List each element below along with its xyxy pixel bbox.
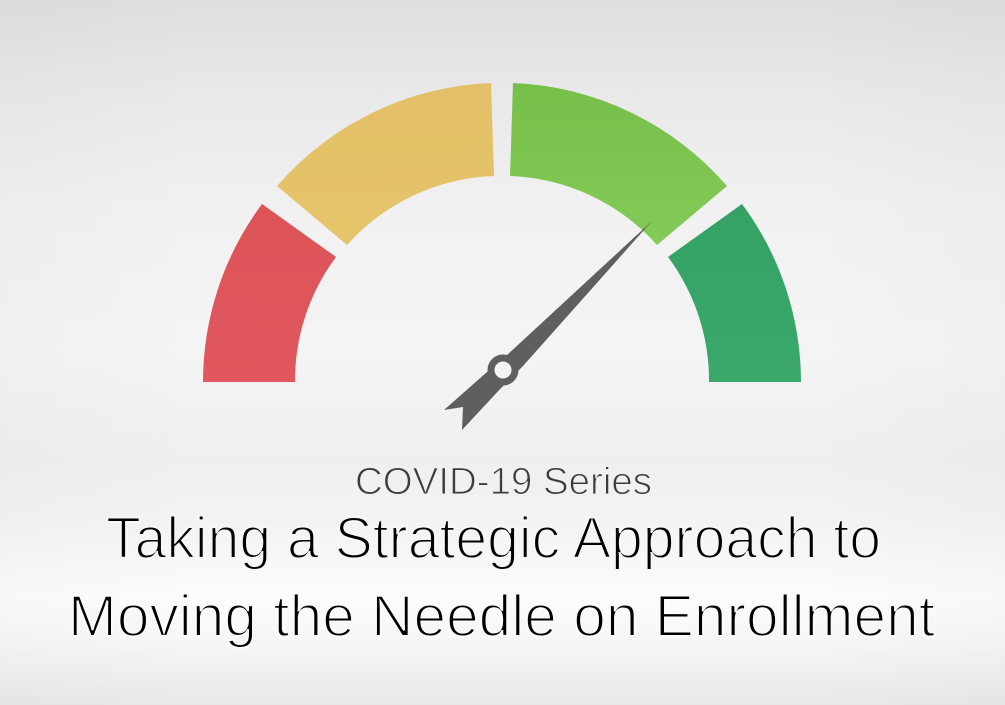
gauge segment: light green <box>510 83 727 245</box>
title line 1: Taking a Strategic Approach to <box>106 506 881 571</box>
gauge <box>203 83 801 430</box>
icon: gauge needle <box>444 221 652 430</box>
gauge segment: dark green <box>668 204 801 382</box>
title line 2: Moving the Needle on Enrollment <box>68 584 935 649</box>
subtitle: COVID-19 Series <box>355 461 652 503</box>
gauge segment: yellow <box>277 83 494 245</box>
title <box>68 506 935 649</box>
gauge segment: red <box>203 204 336 382</box>
